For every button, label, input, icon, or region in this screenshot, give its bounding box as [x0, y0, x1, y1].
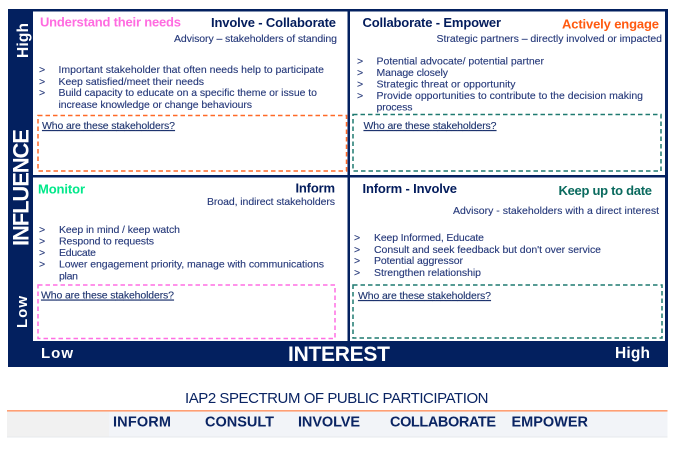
bullet list: >	[354, 255, 360, 267]
heading: Inform - Involve: Inform - Involve	[362, 181, 457, 196]
spectrum stage: CONSULT: CONSULT	[205, 414, 274, 430]
heading: Involve - Collaborate: Involve - Collaborate	[211, 15, 336, 30]
stakeholder input box: Who are these stakeholders?	[358, 290, 491, 302]
panel: low influence, low interest	[38, 180, 335, 338]
bullet list	[357, 56, 643, 114]
heading: Collaborate - Empower: Collaborate - Empower	[362, 15, 501, 30]
engagement label: Monitor: Monitor	[38, 182, 85, 196]
spectrum stage: EMPOWER: EMPOWER	[512, 414, 589, 430]
bullet list: >	[357, 90, 363, 102]
bullet list: process	[376, 102, 412, 114]
bullet list: Lower engagement priority, manage with communications	[59, 258, 324, 270]
bullet list: Keep Informed, Educate	[374, 232, 484, 244]
bullet list	[39, 64, 324, 111]
bullet list: Build capacity to educate on a specific theme or issue to	[58, 87, 317, 99]
bullet list: >	[354, 232, 360, 244]
bullet list: >	[39, 87, 45, 99]
bullet list: Respond to requests	[59, 236, 154, 248]
heading: Inform: Inform	[296, 180, 335, 196]
y axis label: Low: Low	[14, 296, 31, 328]
y axis label: High: High	[15, 23, 32, 58]
bullet list: >	[39, 76, 45, 88]
bullet list: >	[357, 78, 363, 90]
bullet list: >	[39, 236, 45, 248]
bullet list: >	[39, 224, 45, 236]
subheading: Advisory – stakeholders of standing	[174, 33, 337, 45]
panel: high influence, low interest	[38, 14, 346, 171]
stakeholder matrix frame	[8, 9, 668, 367]
spectrum band	[7, 410, 668, 438]
panel: high influence, high interest	[353, 15, 662, 171]
bullet list: Strengthen relationship	[374, 267, 481, 279]
bullet list: Keep satisfied/meet their needs	[58, 76, 204, 88]
bullet list: >	[39, 64, 45, 76]
stakeholder input box	[353, 285, 662, 338]
bullet list: Manage closely	[376, 67, 449, 79]
stakeholder input box: Who are these stakeholders?	[364, 120, 497, 132]
engagement label: Actively engage: Actively engage	[562, 16, 659, 32]
bullet list: Potential aggressor	[374, 255, 464, 267]
x axis label: INTEREST: INTEREST	[288, 343, 390, 366]
bullet list: >	[354, 267, 360, 279]
x axis label: High: High	[615, 345, 650, 362]
bullet list: increase knowledge or change behaviours	[58, 99, 252, 111]
bullet list	[354, 232, 601, 279]
bullet list: >	[39, 247, 45, 259]
y axis label: INFLUENCE: INFLUENCE	[8, 129, 34, 246]
bullet list: >	[357, 56, 363, 68]
bullet list	[39, 224, 324, 282]
subheading: Broad, indirect stakeholders	[207, 196, 335, 208]
panel: low influence, high interest	[353, 181, 662, 338]
spectrum stage: INVOLVE: INVOLVE	[298, 414, 360, 430]
engagement label: Understand their needs: Understand their needs	[40, 14, 181, 30]
bullet list: plan	[59, 270, 78, 282]
subheading: Advisory - stakeholders with a direct interest	[453, 205, 659, 217]
subheading: Strategic partners – directly involved or impacted	[436, 33, 662, 45]
stakeholder input box: Who are these stakeholders?	[41, 290, 174, 302]
stakeholder input box: Who are these stakeholders?	[42, 120, 175, 132]
stakeholder input box	[38, 285, 335, 338]
bullet list: >	[357, 67, 363, 79]
spectrum stage: INFORM: INFORM	[113, 414, 171, 430]
bullet list: >	[354, 244, 360, 256]
bullet list: Potential advocate/ potential partner	[376, 56, 544, 68]
bullet list: Consult and seek feedback but don't over service	[374, 244, 601, 256]
engagement label: Keep up to date: Keep up to date	[558, 183, 652, 198]
bullet list: >	[39, 258, 45, 270]
stakeholder input box	[353, 114, 661, 171]
bullet list: Educate	[59, 247, 96, 259]
bullet list: Strategic threat or opportunity	[376, 78, 516, 90]
bullet list: Provide opportunities to contribute to the decision making	[376, 90, 643, 102]
bullet list: Important stakeholder that often needs help to participate	[58, 64, 324, 76]
title: IAP2 spectrum: IAP2 SPECTRUM OF PUBLIC PARTICIPATION	[185, 390, 488, 407]
x axis label: Low: Low	[41, 345, 73, 362]
bullet list: Keep in mind / keep watch	[59, 224, 180, 236]
spectrum stage: COLLABORATE: COLLABORATE	[390, 414, 496, 430]
stakeholder input box	[38, 116, 346, 171]
